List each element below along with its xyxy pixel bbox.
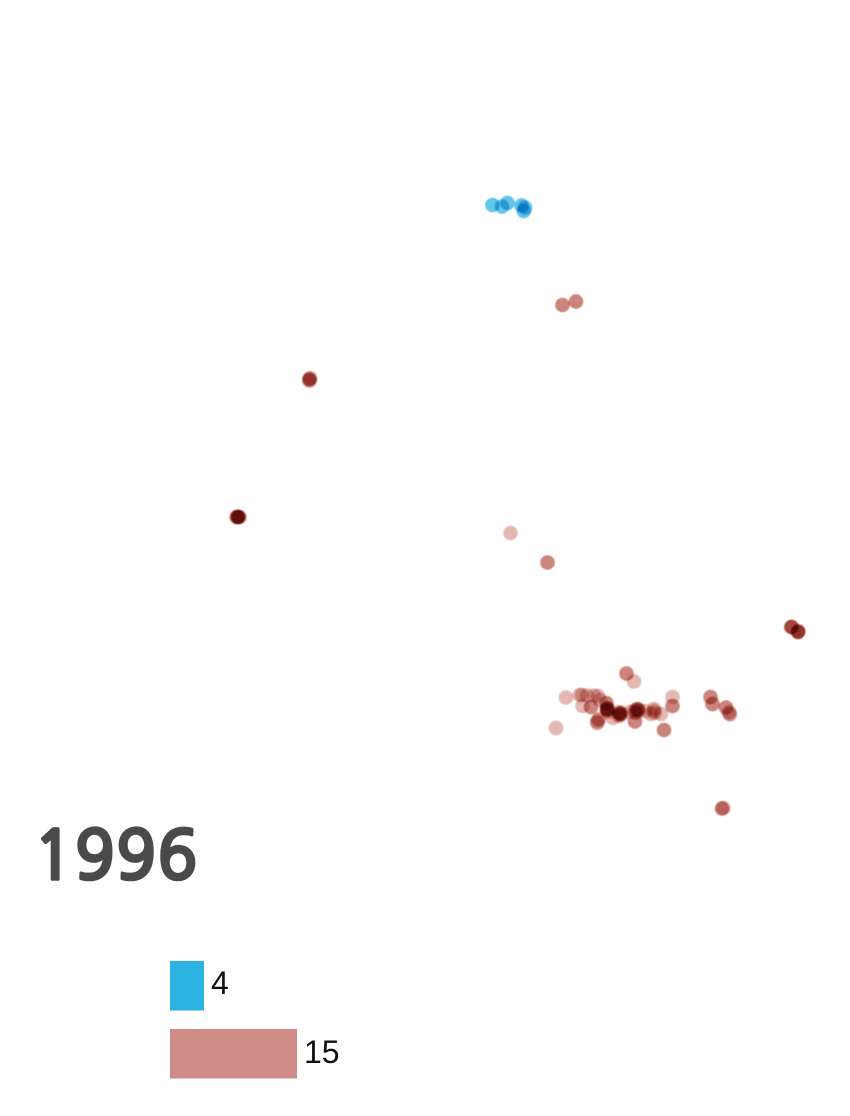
year label: 1996 [33,824,198,891]
red dots: south pair [715,801,731,816]
legend: red bar: 15 [304,1034,340,1070]
red dots: dense point upper left [302,371,317,388]
red dots: right cluster [703,690,737,722]
legend: blue bar: 4 [211,965,229,1001]
red dots: central pair [503,526,555,570]
legend: blue bar [170,961,229,1010]
red dots: east pair [784,620,806,639]
red dots: dense point left [229,510,247,524]
red dots: north pair [555,294,583,312]
blue dot cluster [485,196,532,218]
red dots: main cluster [549,666,680,737]
legend: red bar [170,1029,340,1078]
